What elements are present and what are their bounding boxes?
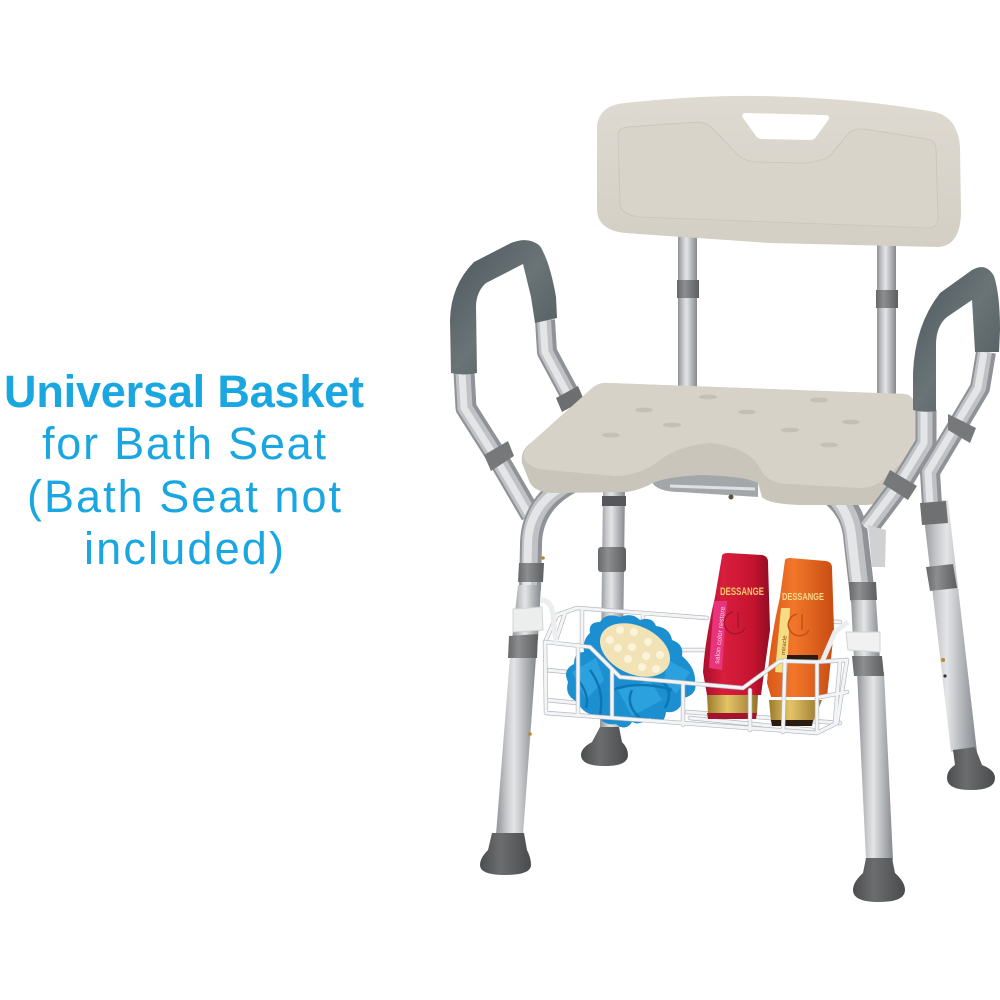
soap bumps xyxy=(606,626,664,673)
right armrest front tube xyxy=(866,410,926,528)
red bottle xyxy=(703,553,770,719)
seat top face xyxy=(524,383,918,488)
left armrest front tube xyxy=(462,372,531,515)
loofah sponge xyxy=(566,615,696,728)
front right tube upper bend xyxy=(828,490,863,600)
front left tube upper bend xyxy=(527,482,572,590)
basket left clip and hook xyxy=(513,600,556,643)
heading line: Universal Basket: Universal Basket xyxy=(4,366,364,417)
backrest textured panel xyxy=(618,122,938,228)
basket back wires xyxy=(545,608,840,730)
seat drainage dimples xyxy=(602,395,860,447)
text line: for Bath Seat: for Bath Seat xyxy=(42,418,326,469)
red bottle logo xyxy=(724,612,745,634)
text line: included: included) xyxy=(84,523,284,574)
right armrest pad xyxy=(913,267,1000,412)
left armrest pad xyxy=(450,240,557,374)
red bottle product name: salon color restore xyxy=(714,606,727,664)
shower chair illustration xyxy=(450,96,1000,902)
front left leg xyxy=(480,556,545,875)
orange bottle logo xyxy=(788,614,809,636)
rear right leg xyxy=(922,500,995,790)
red bottle brand: DESSANGE xyxy=(720,586,764,598)
basket right clip and hook xyxy=(822,622,880,662)
under seat brace xyxy=(653,470,758,500)
front right leg xyxy=(849,525,905,902)
left armrest rear tube xyxy=(543,320,584,412)
loofah folds xyxy=(578,670,672,718)
loofah light patches xyxy=(572,658,690,716)
backrest xyxy=(597,96,961,247)
seat xyxy=(522,383,918,505)
soap bar xyxy=(591,613,679,687)
back posts xyxy=(677,235,898,405)
orange bottle product name: miracle xyxy=(781,635,789,655)
rear left leg xyxy=(581,490,628,766)
orange bottle brand: DESSANGE xyxy=(782,592,824,603)
orange bottle xyxy=(767,558,834,726)
basket front wires xyxy=(545,642,847,733)
text line: Bath Seat not: (Bath Seat not xyxy=(27,471,341,522)
right armrest rear tube xyxy=(920,352,986,525)
heading: universal basket caption xyxy=(4,366,364,574)
